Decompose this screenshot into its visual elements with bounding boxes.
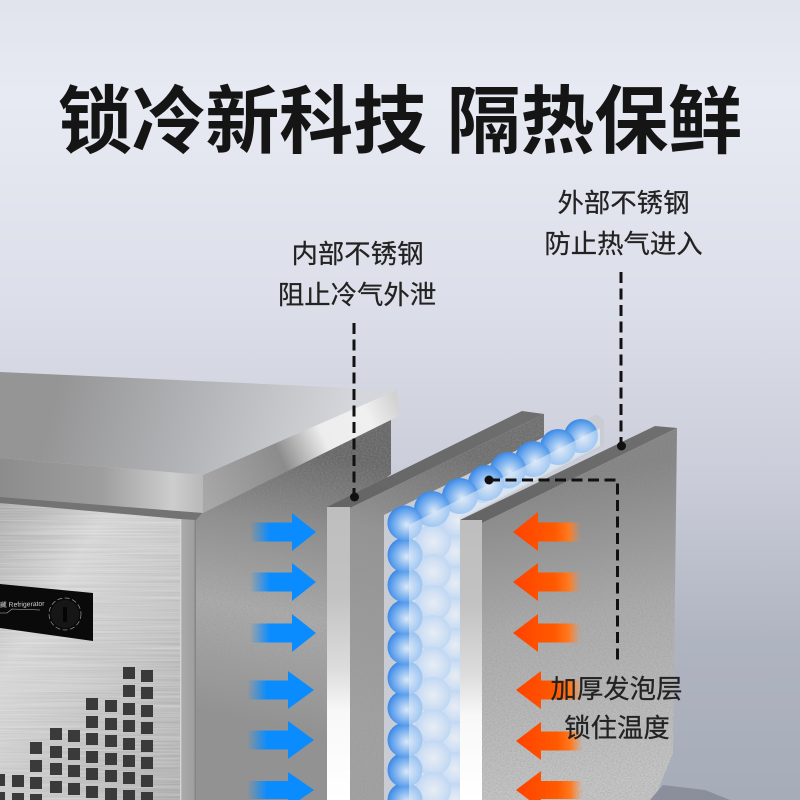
door edge post [180,513,196,800]
inner panel white edge [327,507,350,800]
foam bubbles, top row [388,419,598,540]
red arrows: outside heat blocked [513,512,583,800]
foam backing [384,414,604,800]
inner panel face [350,414,544,800]
door top shadow [0,495,203,520]
callout: inner stainless steel: 内部不锈钢 [292,239,423,269]
title: 锁冷新科技 隔热保鲜 [58,80,742,163]
worktop surface [0,372,397,475]
callout: thick foam layer: 加厚发泡层 [551,674,682,704]
worktop side edge [203,390,399,513]
foam bubbles, back rows [415,484,518,800]
ventilation grille [0,667,153,800]
refrigerated counter [0,372,399,800]
worktop front edge [0,458,203,513]
outer stainless panel [460,426,677,800]
foam translucent front cover [409,428,600,800]
control panel: 藏 Refrigerator [0,599,45,609]
inner panel top bevel [327,411,544,508]
foam bubbles, left column [388,506,422,800]
leader line: foam layer [484,476,618,665]
control panel [0,584,93,641]
outer panel white edge [460,520,482,800]
callout: outer stainless steel: 外部不锈钢 [558,188,689,218]
foam insulation layer [384,414,604,800]
leader line: outer steel [617,272,626,450]
callout: inner stainless steel [278,239,436,310]
callout: outer stainless steel [544,188,703,259]
counter side panel [196,416,391,800]
outer panel face [482,428,677,800]
callout: thick foam layer: 锁住温度 [564,713,670,743]
callout: thick foam layer [551,674,682,743]
outer panel top bevel [460,426,677,523]
blue arrows: cold air kept inside [247,513,316,800]
callout: outer stainless steel: 防止热气进入 [544,229,703,259]
counter door [0,495,196,800]
inner stainless panel [327,411,544,800]
leader line: inner steel [350,323,359,502]
callout: inner stainless steel: 阻止冷气外泄 [278,280,436,310]
